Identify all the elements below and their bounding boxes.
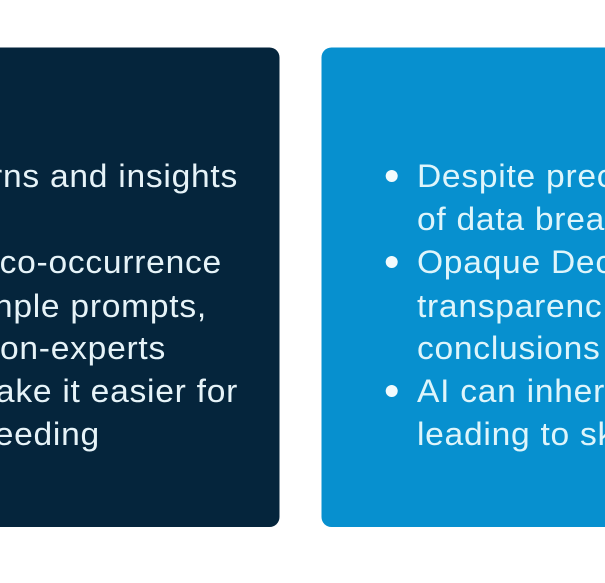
text block: benefits list bbox=[0, 158, 238, 452]
text block: benefits list: nple prompts, bbox=[0, 288, 207, 324]
text block: risks list bbox=[417, 158, 605, 452]
bullets bbox=[386, 170, 398, 397]
text block: benefits list: ake it easier for bbox=[0, 373, 238, 409]
text block: risks list: of data brea bbox=[417, 201, 605, 237]
panel: dark navy benefits bbox=[0, 48, 280, 527]
text block: risks list: transparenc bbox=[417, 288, 602, 324]
text block: benefits list: co-occurrence bbox=[0, 244, 222, 280]
text block: benefits list: on-experts bbox=[0, 330, 166, 366]
text block: risks list: conclusions bbox=[417, 330, 601, 366]
panel: blue risks bbox=[322, 48, 605, 527]
text block: risks list: AI can inher bbox=[417, 373, 605, 409]
